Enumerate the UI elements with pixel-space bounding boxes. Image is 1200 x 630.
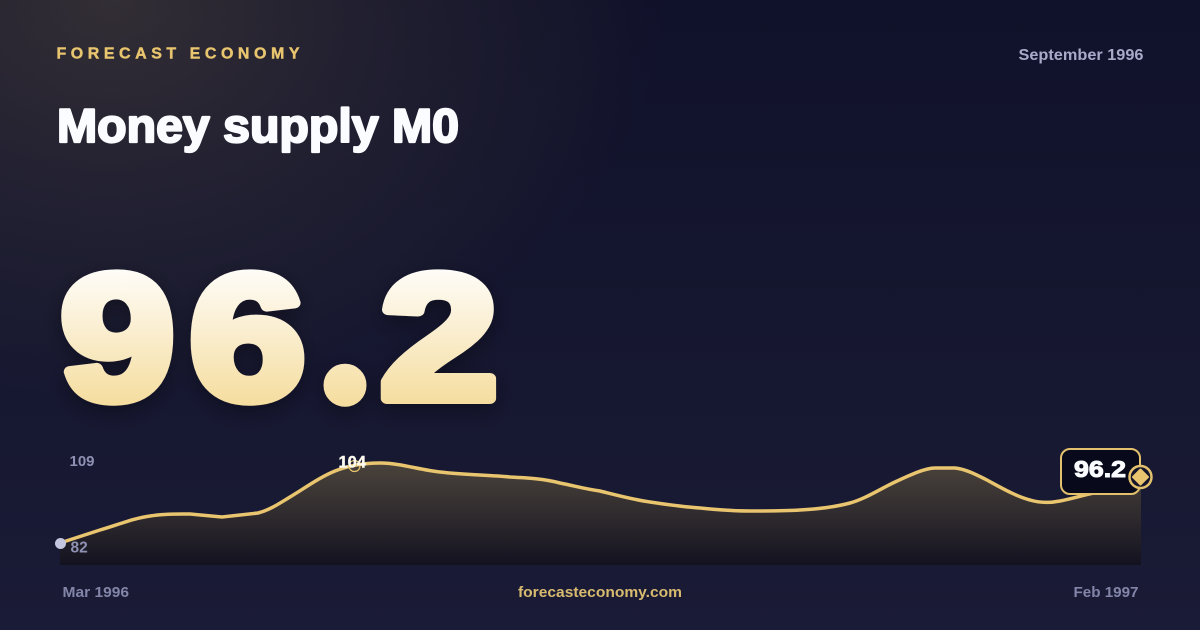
end date label: Feb 1997 <box>1074 585 1138 601</box>
big value <box>60 168 498 461</box>
peak marker <box>349 460 360 472</box>
peak label: 104 <box>338 454 367 472</box>
current point marker <box>1130 466 1152 488</box>
website label: forecasteconomy.com <box>518 585 682 601</box>
chart line <box>60 463 1141 543</box>
big value: 6 <box>190 238 306 436</box>
axis max label: 109 <box>70 453 95 470</box>
area chart <box>55 449 1152 565</box>
start point marker <box>55 538 66 549</box>
big value: . <box>312 168 378 461</box>
title: Money supply M0 <box>57 99 459 152</box>
current value callout: 96.2 <box>1074 456 1126 482</box>
date label: September 1996 <box>1018 47 1144 64</box>
big value: 9 <box>60 238 174 436</box>
brand label: FORECAST ECONOMY <box>56 46 300 62</box>
big value: 2 <box>380 238 498 436</box>
chart area fill <box>60 463 1141 565</box>
current value callout <box>1061 449 1140 494</box>
axis min label: 82 <box>70 540 88 556</box>
start date label: Mar 1996 <box>62 585 129 601</box>
